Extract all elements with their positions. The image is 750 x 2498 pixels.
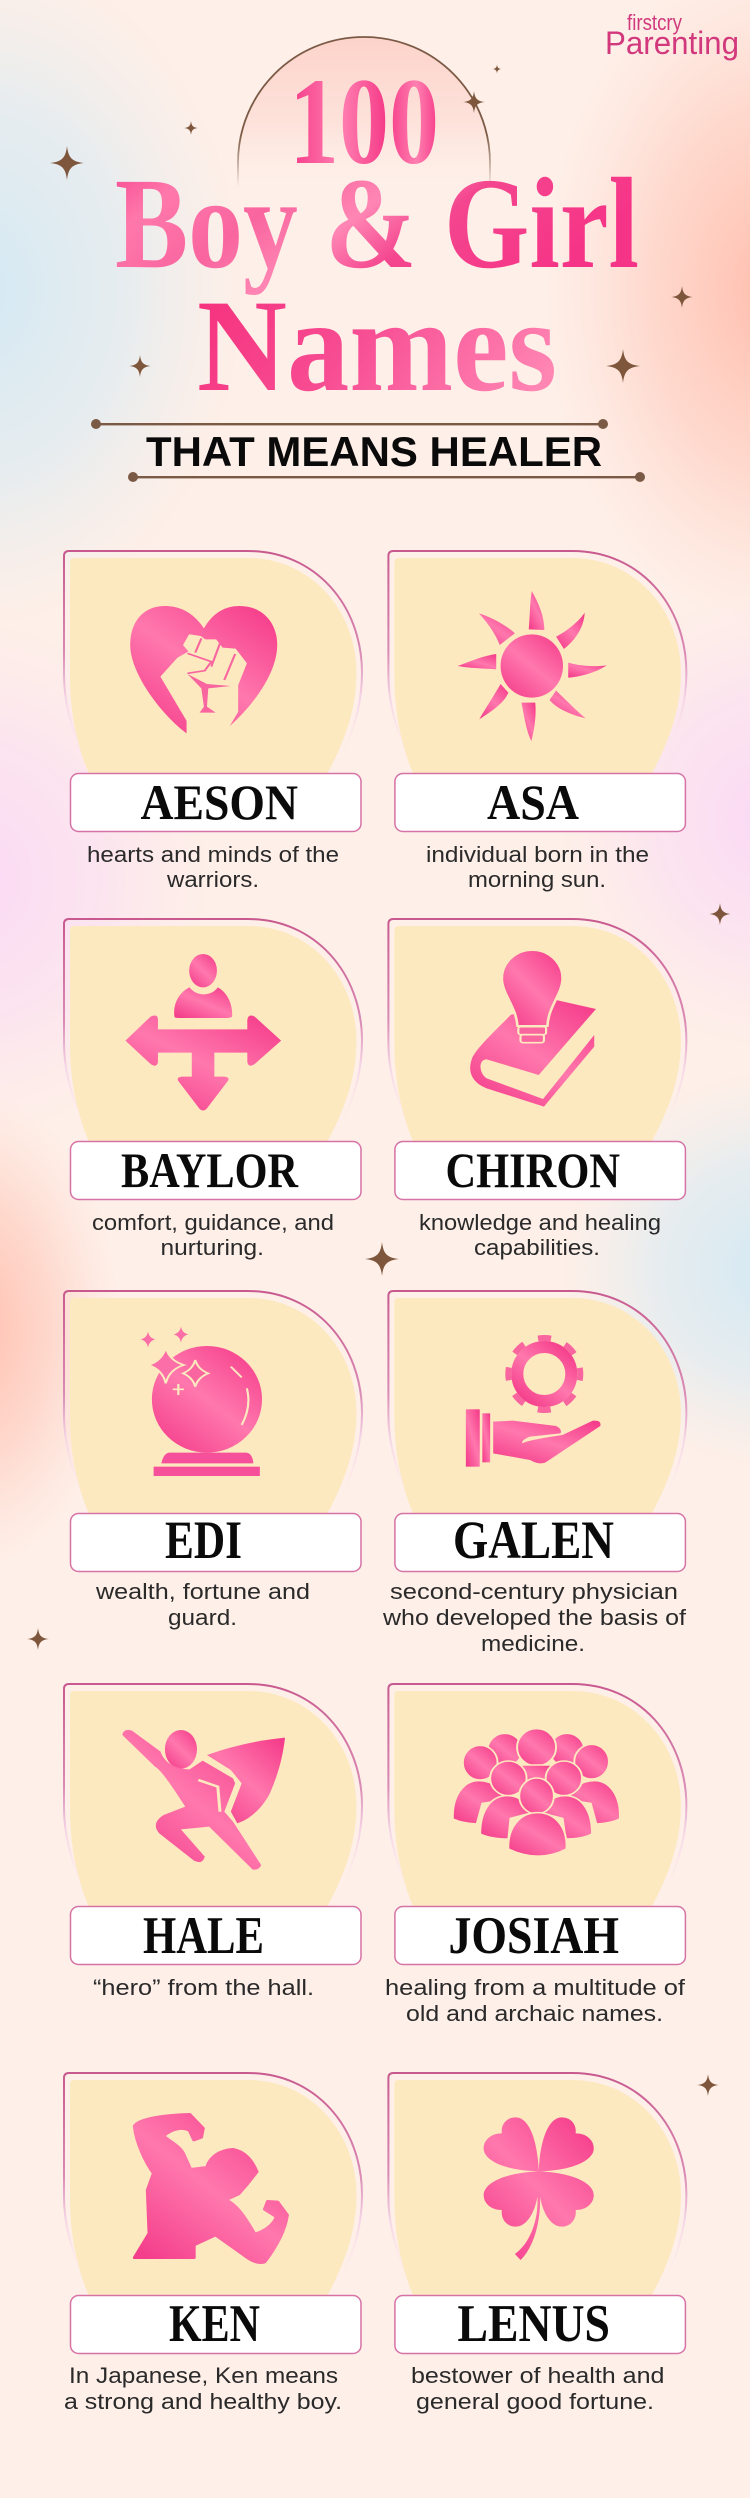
logo: FirstCry Parenting: Parenting	[605, 25, 739, 61]
logo: FirstCry Parenting	[605, 10, 739, 61]
icon: crystal ball	[141, 1327, 262, 1476]
subtitle: THAT MEANS HEALER	[146, 428, 602, 475]
description: old and archaic names.	[406, 2001, 663, 2026]
description: individual born in the	[426, 842, 649, 867]
name: LENUS	[458, 2295, 610, 2353]
icon: sun	[458, 591, 607, 741]
name label	[395, 1514, 685, 1572]
name: AESON	[140, 774, 298, 830]
name label	[70, 1906, 361, 1964]
card: EDI	[64, 1291, 362, 1630]
icon: four-leaf clover	[484, 2117, 594, 2260]
description	[64, 2363, 342, 2414]
description: bestower of health and	[411, 2363, 664, 2388]
description	[87, 842, 339, 892]
description	[92, 1210, 334, 1260]
subtitle rule bottom	[128, 472, 645, 482]
description: “hero” from the hall.	[93, 1975, 314, 2000]
description: guard.	[168, 1605, 237, 1630]
title: 100: 100	[289, 53, 439, 190]
icon: person with arrows	[125, 954, 281, 1110]
card: BAYLOR	[64, 919, 362, 1260]
name: KEN	[169, 2295, 260, 2353]
description: wealth, fortune and	[95, 1579, 310, 1604]
logo: FirstCry Parenting: firstcry	[627, 10, 682, 35]
name: CHIRON	[446, 1142, 620, 1198]
card: GALEN	[382, 1291, 687, 1656]
name: EDI	[165, 1510, 242, 1570]
description	[419, 1210, 661, 1260]
title: Names: Names	[197, 272, 557, 419]
description: comfort, guidance, and	[92, 1210, 334, 1235]
description: healing from a multitude of	[385, 1975, 686, 2000]
description: who developed the basis of	[382, 1605, 687, 1630]
name label	[70, 774, 361, 832]
name label	[395, 774, 685, 832]
name: HALE	[143, 1907, 264, 1965]
icon: book and light bulb	[470, 950, 596, 1107]
name: ASA	[487, 774, 579, 830]
name: JOSIAH	[448, 1907, 619, 1965]
card: LENUS	[388, 2073, 686, 2414]
decorative sparkles	[27, 64, 731, 2096]
name label	[70, 1142, 361, 1200]
name label	[395, 2296, 685, 2354]
name label	[395, 1142, 685, 1200]
icon: heart with fist	[130, 606, 277, 734]
card: ASA	[388, 551, 686, 892]
card: HALE	[64, 1684, 362, 2000]
description	[411, 2363, 664, 2414]
name label	[395, 1906, 685, 1964]
icon: muscular man	[135, 2114, 287, 2263]
description: In Japanese, Ken means	[69, 2363, 338, 2388]
description: warriors.	[166, 867, 259, 892]
card: AESON	[64, 551, 362, 892]
description: medicine.	[481, 1631, 585, 1656]
description: a strong and healthy boy.	[64, 2389, 342, 2414]
card: JOSIAH	[385, 1684, 686, 2026]
description: hearts and minds of the	[87, 842, 339, 867]
icon: crowd of people	[453, 1729, 620, 1856]
description	[426, 842, 649, 892]
icon: hand holding gear	[466, 1338, 600, 1467]
description	[95, 1579, 310, 1630]
description: general good fortune.	[416, 2389, 654, 2414]
subtitle rule top	[91, 419, 608, 429]
description: morning sun.	[468, 867, 606, 892]
description	[382, 1579, 687, 1656]
name: GALEN	[453, 1510, 614, 1570]
description: nurturing.	[160, 1235, 264, 1260]
description: capabilities.	[474, 1235, 600, 1260]
card: CHIRON	[388, 919, 686, 1260]
description: second-century physician	[390, 1579, 678, 1604]
name label	[70, 2296, 361, 2354]
description	[385, 1975, 686, 2026]
title: Boy & Girl: Boy & Girl	[115, 152, 639, 296]
title arch	[238, 37, 490, 187]
icon: flying hero	[122, 1730, 285, 1870]
name label	[70, 1514, 361, 1572]
arch outline	[238, 37, 490, 187]
name: BAYLOR	[121, 1142, 299, 1198]
description: knowledge and healing	[419, 1210, 661, 1235]
card: KEN	[64, 2073, 362, 2414]
